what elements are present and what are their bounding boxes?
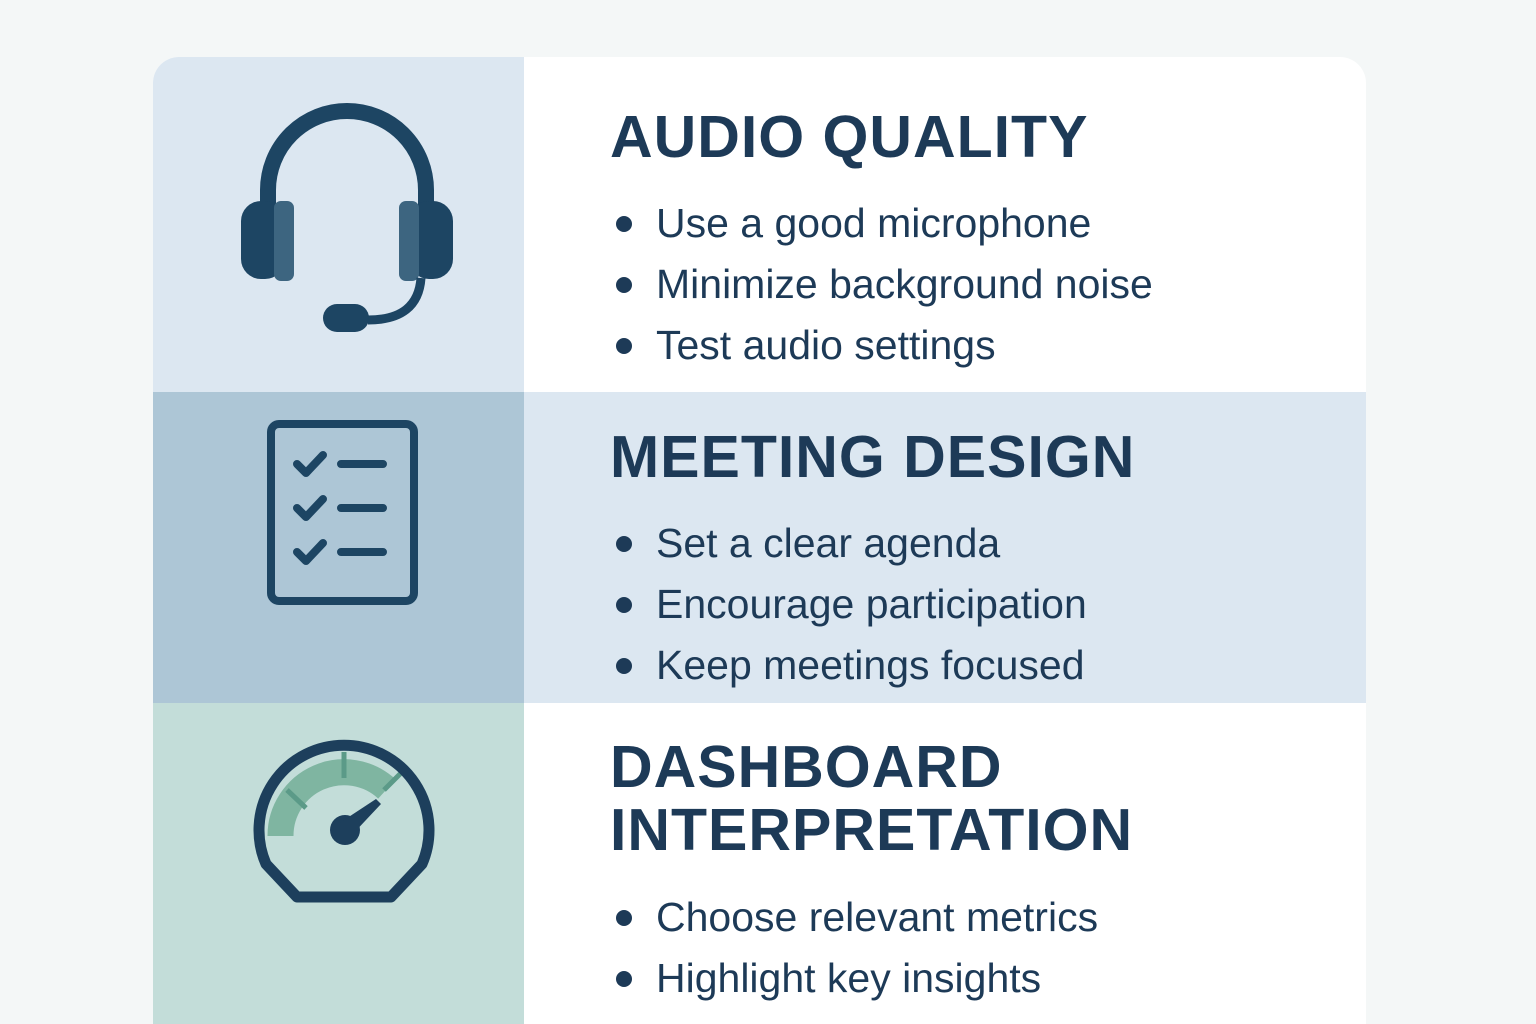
bullets: meeting: Encourage participation: [656, 581, 1087, 627]
heading: audio quality: AUDIO QUALITY: [610, 104, 1088, 170]
icon: headset: [241, 103, 453, 332]
heading: dashboard interpretation: INTERPRETATION: [610, 797, 1133, 863]
icon: checklist: [267, 420, 418, 605]
bullets: audio: Minimize background noise: [656, 261, 1153, 307]
bullets: meeting: Set a clear agenda: [656, 520, 1000, 566]
bullets: audio: [616, 200, 1153, 368]
icon: gauge: [254, 740, 434, 902]
bullets: audio: Test audio settings: [656, 322, 996, 368]
bullets: dashboard: Choose relevant metrics: [656, 894, 1098, 940]
heading: meeting design: MEETING DESIGN: [610, 424, 1135, 490]
heading: dashboard interpretation: DASHBOARD: [610, 734, 1002, 800]
card: [153, 57, 1366, 1024]
bullets: meeting: [616, 520, 1087, 688]
bullets: meeting: Keep meetings focused: [656, 642, 1084, 688]
bullets: dashboard: Highlight key insights: [656, 955, 1041, 1001]
bullets: dashboard: [616, 894, 1098, 1001]
bullets: audio: Use a good microphone: [656, 200, 1091, 246]
heading: dashboard interpretation: [610, 734, 1133, 863]
